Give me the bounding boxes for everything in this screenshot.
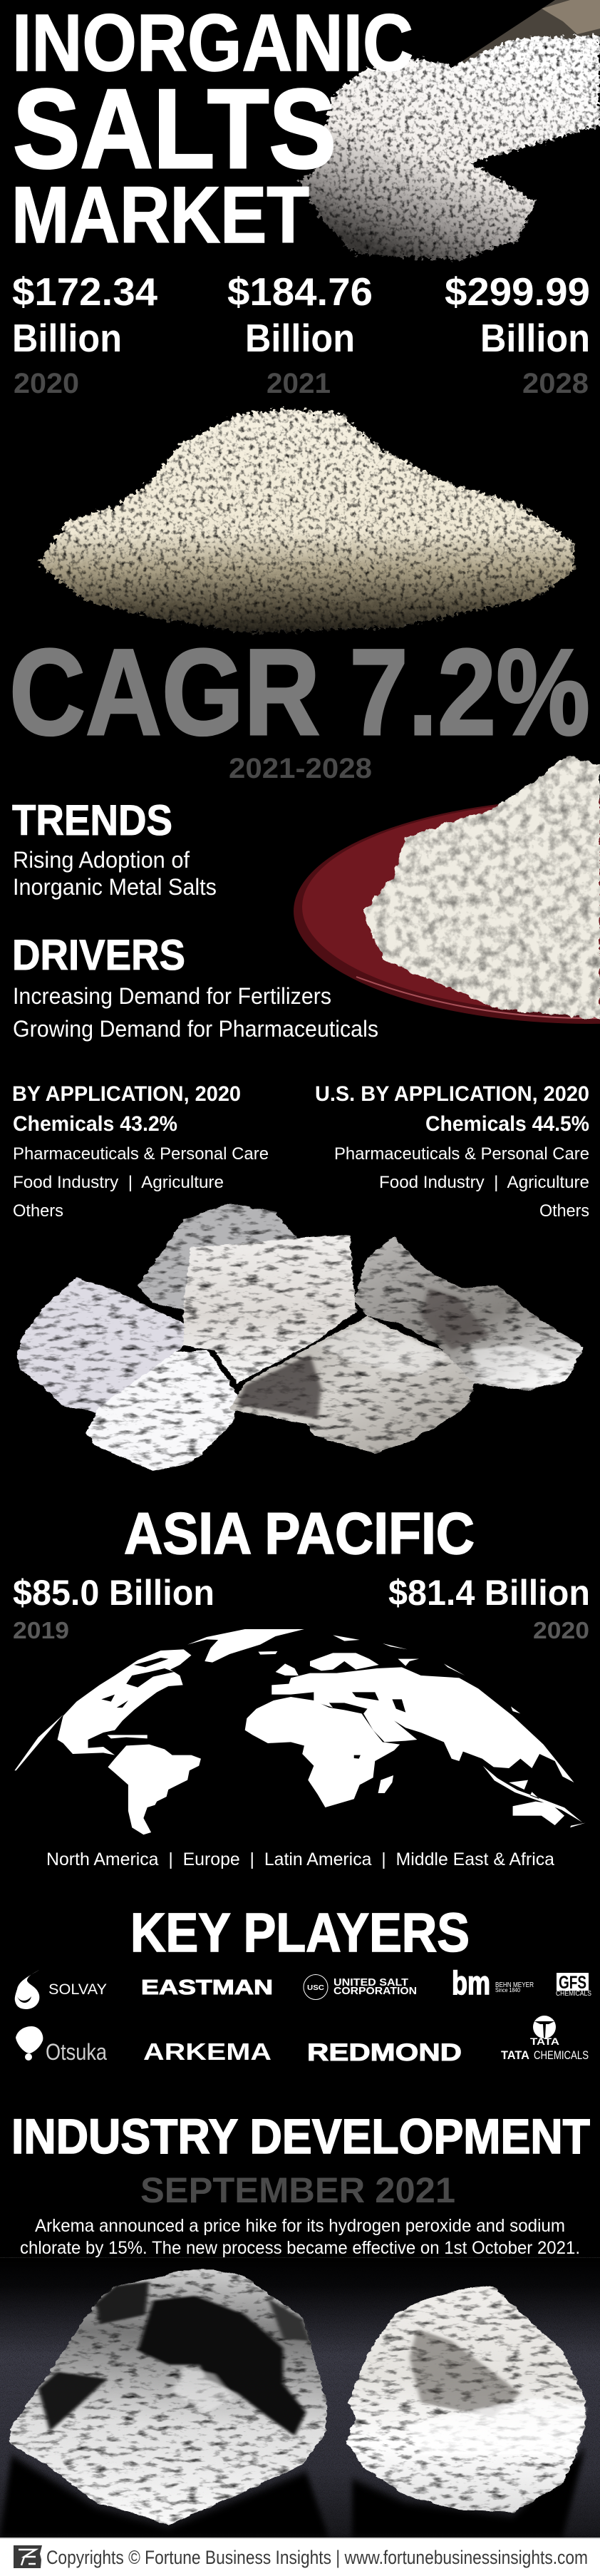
market size 2020: Billion bbox=[12, 316, 122, 360]
photo: salt crystals bbox=[17, 1204, 584, 1471]
logo: Tata Chemicals bbox=[501, 2016, 589, 2062]
logo: Behn Meyer: Since 1840 bbox=[495, 1987, 520, 1993]
market size 2021 bbox=[227, 270, 373, 399]
market size 2021: Billion bbox=[245, 316, 355, 360]
photo: salt pouring from scoop bbox=[299, 0, 600, 260]
globe rim arc bbox=[14, 1715, 63, 1770]
photo: salt rocks on dark surface bbox=[0, 2258, 600, 2538]
logo: Redmond: REDMOND bbox=[307, 2039, 462, 2066]
footer bbox=[0, 2537, 600, 2576]
Asia Pacific 2020 bbox=[388, 1573, 590, 1643]
title: SALTS bbox=[13, 66, 336, 192]
logo: United Salt Corporation: UNITED SALT bbox=[333, 1976, 408, 1989]
logo: Behn Meyer bbox=[452, 1964, 534, 2001]
island: Madagascar bbox=[378, 1775, 393, 1793]
icon: Fortune Business Insights logo bbox=[14, 2545, 42, 2568]
logo: GFS Chemicals bbox=[556, 1973, 591, 1998]
development date: SEPTEMBER 2021 bbox=[140, 2170, 455, 2210]
by application US: Pharmaceuticals & Personal Care bbox=[334, 1144, 589, 1164]
market size 2021: 2021 bbox=[267, 368, 331, 399]
island: Iceland bbox=[258, 1651, 277, 1655]
trends: Inorganic Metal Salts bbox=[13, 874, 217, 900]
trends: Rising Adoption of bbox=[13, 847, 190, 873]
market size 2028: $299.99 bbox=[445, 270, 590, 314]
heading: Asia Pacific: ASIA PACIFIC bbox=[124, 1500, 475, 1566]
island: Cuba bbox=[107, 1735, 148, 1738]
logo: Solvay bbox=[15, 1970, 107, 2009]
logo: Otsuka: Otsuka bbox=[46, 2039, 107, 2065]
by application US: U.S. BY APPLICATION, 2020 bbox=[315, 1082, 589, 1106]
by application global: Others bbox=[13, 1201, 63, 1221]
trends bbox=[12, 796, 217, 900]
logo: GFS Chemicals: CHEMICALS bbox=[556, 1990, 591, 1998]
development description: chlorate by 15%. The new process became effective on 1st October 2021. bbox=[20, 2238, 580, 2258]
title: MARKET bbox=[11, 170, 309, 260]
photo: powder on red plate bbox=[294, 756, 600, 1024]
drivers: Growing Demand for Pharmaceuticals bbox=[13, 1016, 378, 1042]
drivers bbox=[12, 931, 378, 1042]
drivers: DRIVERS bbox=[12, 931, 185, 979]
drivers: Increasing Demand for Fertilizers bbox=[13, 983, 331, 1009]
development description bbox=[20, 2216, 580, 2258]
logo: Arkema: ARKEMA bbox=[143, 2038, 271, 2065]
market size 2028: 2028 bbox=[522, 368, 589, 399]
by application US: Chemicals 44.5% bbox=[425, 1112, 589, 1136]
Asia Pacific 2020: $81.4 Billion bbox=[388, 1573, 590, 1613]
continent: North America bbox=[58, 1649, 191, 1755]
photo: salt pile bbox=[38, 409, 574, 632]
CAGR period: 2021-2028 bbox=[229, 753, 372, 784]
continent: Africa bbox=[245, 1697, 400, 1807]
Asia Pacific 2019: 2019 bbox=[13, 1617, 69, 1643]
by application global: Food Industry | Agriculture bbox=[13, 1173, 224, 1192]
islands: Britain bbox=[276, 1663, 299, 1676]
market size 2020 bbox=[12, 270, 157, 399]
title: INORGANIC bbox=[12, 0, 413, 88]
world map globe bbox=[14, 1629, 586, 1834]
continent: Greenland bbox=[187, 1629, 304, 1663]
continent: Eurasia bbox=[271, 1667, 574, 1782]
logo: Behn Meyer: BEHN MEYER bbox=[495, 1981, 534, 1989]
by application global: BY APPLICATION, 2020 bbox=[12, 1082, 241, 1106]
continent: South America bbox=[108, 1745, 201, 1834]
market size 2028: Billion bbox=[480, 316, 590, 360]
Asia Pacific 2020: 2020 bbox=[533, 1617, 589, 1643]
logo: GFS Chemicals: GFS bbox=[559, 1973, 586, 1993]
logo: United Salt Corporation: USC bbox=[307, 1984, 324, 1992]
logo: Solvay: SOLVAY bbox=[48, 1981, 107, 1998]
Asia Pacific 2019: $85.0 Billion bbox=[13, 1573, 214, 1613]
logo: United Salt Corporation: CORPORATION bbox=[333, 1985, 417, 1997]
title bbox=[11, 0, 413, 260]
logo: Behn Meyer: bm bbox=[452, 1964, 490, 2001]
market size 2020: $172.34 bbox=[12, 270, 157, 314]
regions list: North America | Europe | Latin America | Middle East & Africa bbox=[46, 1849, 554, 1869]
market size 2020: 2020 bbox=[14, 368, 79, 399]
logo: Tata Chemicals: TATA bbox=[530, 2036, 559, 2047]
continent: Australia bbox=[513, 1802, 564, 1825]
market size 2021: $184.76 bbox=[227, 270, 373, 314]
islands: Indonesia bbox=[483, 1766, 586, 1827]
development description: Arkema announced a price hike for its hydrogen peroxide and sodium bbox=[35, 2216, 565, 2236]
by application US: Food Industry | Agriculture bbox=[379, 1173, 589, 1192]
market size 2028 bbox=[445, 270, 590, 399]
by application global: Chemicals 43.2% bbox=[13, 1112, 177, 1136]
logo: United Salt Corporation bbox=[304, 1975, 417, 1999]
logo: Tata Chemicals: TATA bbox=[501, 2048, 529, 2062]
trends: TRENDS bbox=[12, 796, 172, 844]
by application global: Pharmaceuticals & Personal Care bbox=[13, 1144, 269, 1164]
peninsula: Scandinavia bbox=[310, 1653, 379, 1671]
islands: Arctic bbox=[333, 1635, 520, 1713]
by application US bbox=[315, 1082, 589, 1221]
Asia Pacific 2019 bbox=[13, 1573, 214, 1643]
heading: Key Players: KEY PLAYERS bbox=[130, 1902, 470, 1964]
logo: Eastman: EASTMAN bbox=[141, 1976, 273, 1999]
by application US: Others bbox=[539, 1201, 589, 1221]
by application global bbox=[12, 1082, 269, 1221]
logo: Otsuka bbox=[16, 2026, 107, 2065]
